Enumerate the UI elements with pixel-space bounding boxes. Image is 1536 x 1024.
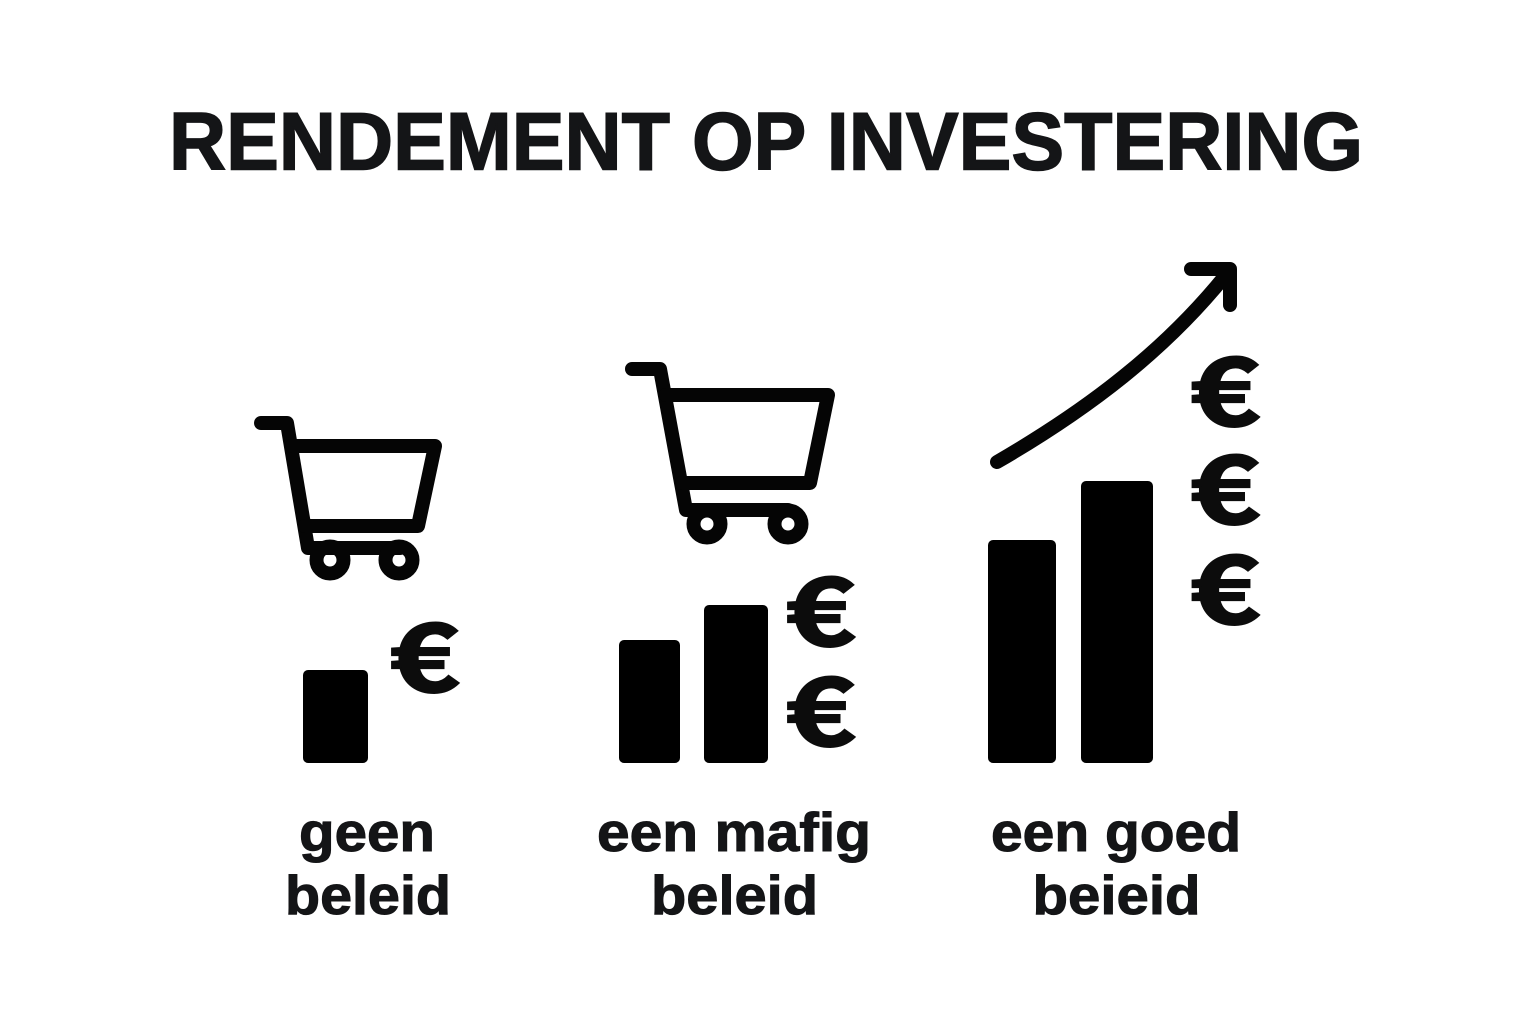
bars: een matig beleid	[619, 605, 768, 763]
icon: euro: €	[390, 584, 460, 720]
icons: euros: €	[1190, 516, 1260, 652]
label: een matig beleid	[597, 801, 871, 926]
bar: geen beleid	[303, 670, 368, 763]
icon: shopping cart small	[261, 423, 435, 574]
icons: euros	[786, 538, 856, 774]
icons: euros	[1190, 318, 1260, 652]
title: RENDEMENT OP INVESTERING	[169, 96, 1363, 188]
label: een goed beleid: beieid	[1032, 864, 1200, 926]
label: een goed beleid	[991, 801, 1241, 926]
icons: euros: €	[786, 538, 856, 674]
icon: shopping cart medium	[632, 369, 828, 538]
panel: een goed beleid	[988, 269, 1260, 926]
icons: euros: €	[1190, 318, 1260, 454]
icons: euros: €	[786, 638, 856, 774]
label: een goed beleid: een goed	[991, 801, 1241, 863]
panel: geen beleid	[261, 423, 460, 926]
label: een matig beleid: een mafig	[597, 801, 871, 863]
label: geen beleid: beleid	[285, 864, 451, 926]
label: geen beleid	[285, 801, 451, 926]
arrow: rising	[997, 269, 1230, 462]
label: een matig beleid: beleid	[651, 864, 818, 926]
panel: een matig beleid	[597, 369, 871, 926]
bars: een goed beleid	[988, 481, 1153, 763]
label: geen beleid: geen	[299, 801, 435, 863]
icons: euros: €	[1190, 416, 1260, 552]
